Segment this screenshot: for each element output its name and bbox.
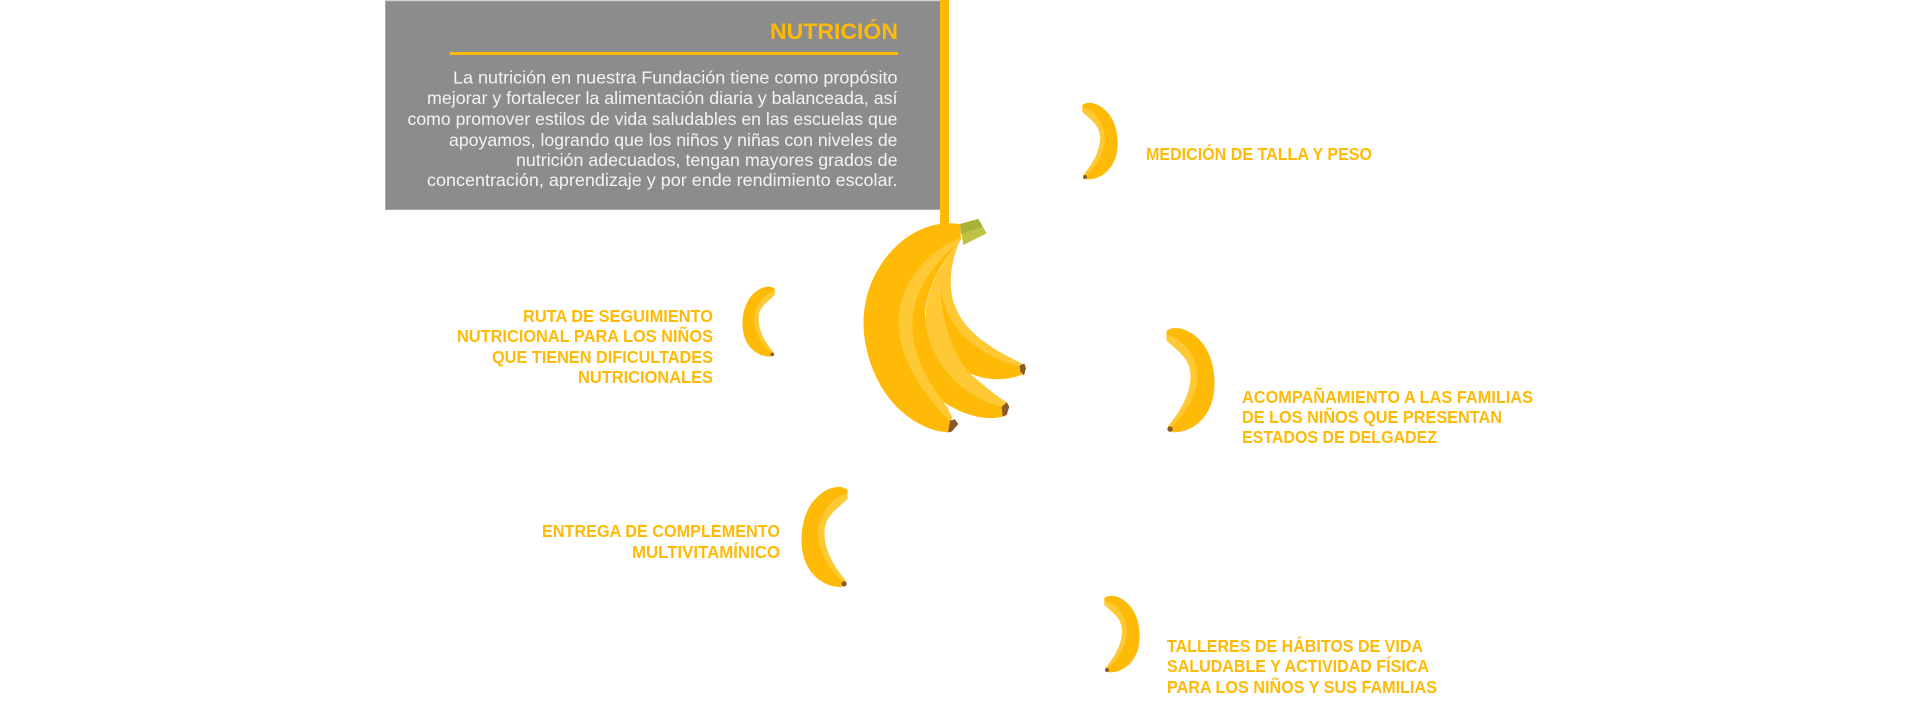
text block: intro paragraph: como promover estilos de vida saludables en las escuelas que [408,109,898,129]
label: DE LOS NIÑOS QUE PRESENTAN [1242,406,1502,427]
text block: intro paragraph: nutrición adecuados, tengan mayores grados de [516,150,898,170]
text block: intro paragraph: concentración, aprendizaje y por ende rendimiento escolar. [427,170,898,190]
label: ESTADOS DE DELGADEZ [1242,427,1437,447]
label: PARA LOS NIÑOS Y SUS FAMILIAS [1167,676,1437,697]
text block: intro paragraph: apoyamos, logrando que los niños y niñas con niveles de [449,130,898,150]
middle banana [909,242,1009,418]
label [457,306,713,387]
heading underline [450,52,898,55]
label: NUTRICIONAL PARA LOS NIÑOS [457,325,713,346]
heading: nutrición: NUTRICIÓN [770,19,898,44]
label: SALUDABLE Y ACTIVIDAD FÍSICA [1167,655,1429,676]
label: ACOMPAÑAMIENTO A LAS FAMILIAS [1242,386,1533,407]
back banana [936,240,1026,379]
icon: small banana [1104,596,1140,672]
item: talleres de hábitos de vida [1104,596,1437,697]
icon: small banana [1082,103,1118,179]
text block: intro paragraph [408,68,898,190]
text block: intro paragraph: La nutrición en nuestra Fundación tiene como propósito [453,68,898,88]
label [542,521,780,562]
label: MULTIVITAMÍNICO [632,541,780,562]
vertical yellow bar [940,0,949,226]
icon: small banana mirrored [742,287,775,357]
label: ENTREGA DE COMPLEMENTO [542,521,780,541]
icon: small banana mirrored [801,487,848,587]
icon: banana bunch [864,219,1026,432]
stem [960,219,987,245]
label [1167,635,1437,697]
icon: small banana [1166,328,1215,432]
label: RUTA DE SEGUIMIENTO [523,306,713,326]
label: TALLERES DE HÁBITOS DE VIDA [1167,635,1423,656]
item: ruta de seguimiento nutricional [457,287,775,387]
label: MEDICIÓN DE TALLA Y PESO [1146,143,1372,164]
item: acompañamiento a las familias [1166,328,1533,447]
label: QUE TIENEN DIFICULTADES [492,347,713,367]
item: medición de talla y peso [1082,103,1372,179]
label [1242,386,1533,447]
item: entrega de complemento multivitamínico [542,487,848,587]
text block: intro paragraph: mejorar y fortalecer la alimentación diaria y balanceada, así [427,88,898,108]
panel: nutrición intro [386,1,940,210]
front banana [864,223,961,432]
label: NUTRICIONALES [578,367,713,387]
